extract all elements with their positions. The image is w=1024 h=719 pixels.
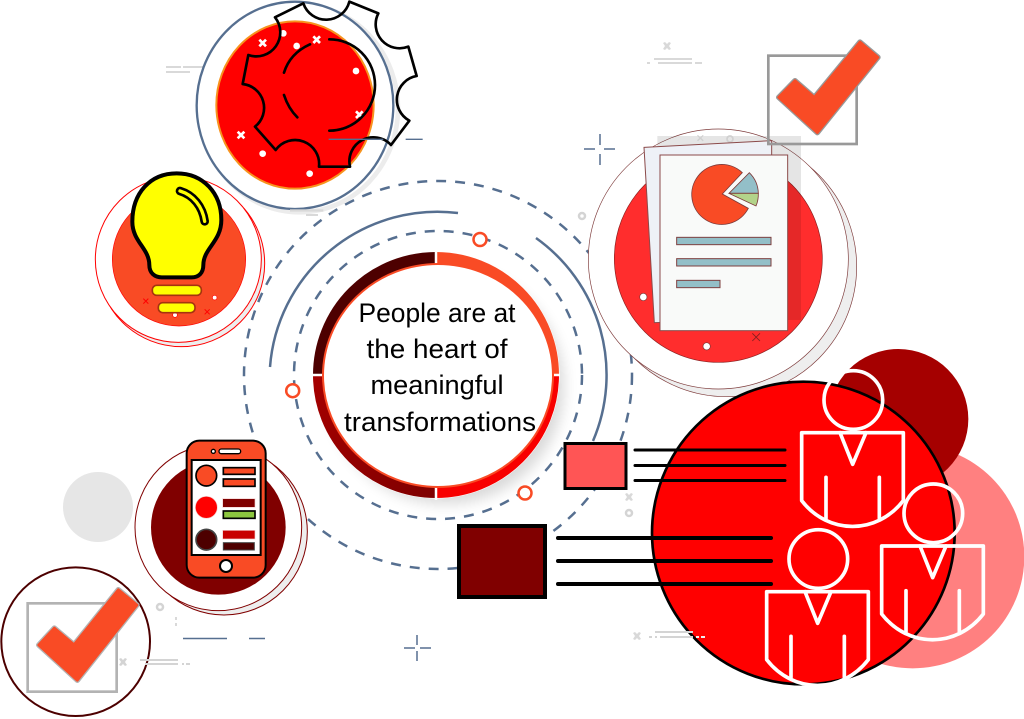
central message: People are at [358, 298, 516, 328]
gear outline [243, 2, 417, 167]
phone body [187, 441, 266, 578]
red box text lines [635, 450, 785, 480]
person top [802, 371, 903, 526]
dark box text lines [558, 538, 771, 584]
background grey decorations [166, 42, 702, 626]
dark label box [459, 526, 545, 597]
phone backdrop circles [141, 448, 307, 615]
bottom checkbox illustration [1, 567, 150, 716]
grey circle [63, 472, 133, 542]
person right [882, 484, 983, 640]
gear illustration [197, 2, 423, 216]
app list rows [195, 465, 255, 550]
report document illustration [588, 42, 878, 397]
pie chart [692, 164, 758, 224]
bulb highlight [180, 191, 205, 221]
central message [344, 298, 536, 437]
text bars [677, 237, 771, 288]
people illustration [652, 349, 1024, 685]
bulb backdrop circles [98, 180, 265, 347]
phone screen [192, 460, 261, 555]
front page [660, 155, 788, 331]
checkbox square [28, 603, 117, 692]
document backdrop circles [597, 137, 857, 397]
sparkle dots and crosses [238, 30, 363, 177]
decorative blue crosshairs and dashes [183, 134, 615, 661]
bulb glass [132, 173, 221, 277]
phone illustration [135, 441, 307, 615]
main red circle [652, 382, 955, 684]
central message: meaningful [370, 370, 504, 400]
person bottom [767, 530, 868, 685]
bulb base bars [152, 285, 201, 295]
central message: transformations [344, 407, 536, 437]
dashed and solid orbit rings [244, 181, 632, 569]
checkmark [39, 590, 137, 680]
top checkbox [768, 42, 878, 144]
grey ring dots [157, 213, 632, 610]
light bulb illustration [95, 173, 265, 347]
back page [644, 141, 772, 323]
orbit marker circles [286, 233, 532, 500]
gear backdrop circles [201, 4, 398, 212]
central circle [312, 250, 564, 504]
pink backdrop circle [801, 445, 1024, 668]
dark backdrop circle [828, 349, 968, 489]
central message: the heart of [366, 334, 508, 364]
grey dashes over people circle [633, 631, 705, 640]
red label box [565, 444, 626, 488]
grey dashes over bottom checkbox ring [119, 658, 190, 666]
checkbox ring [1, 567, 150, 716]
